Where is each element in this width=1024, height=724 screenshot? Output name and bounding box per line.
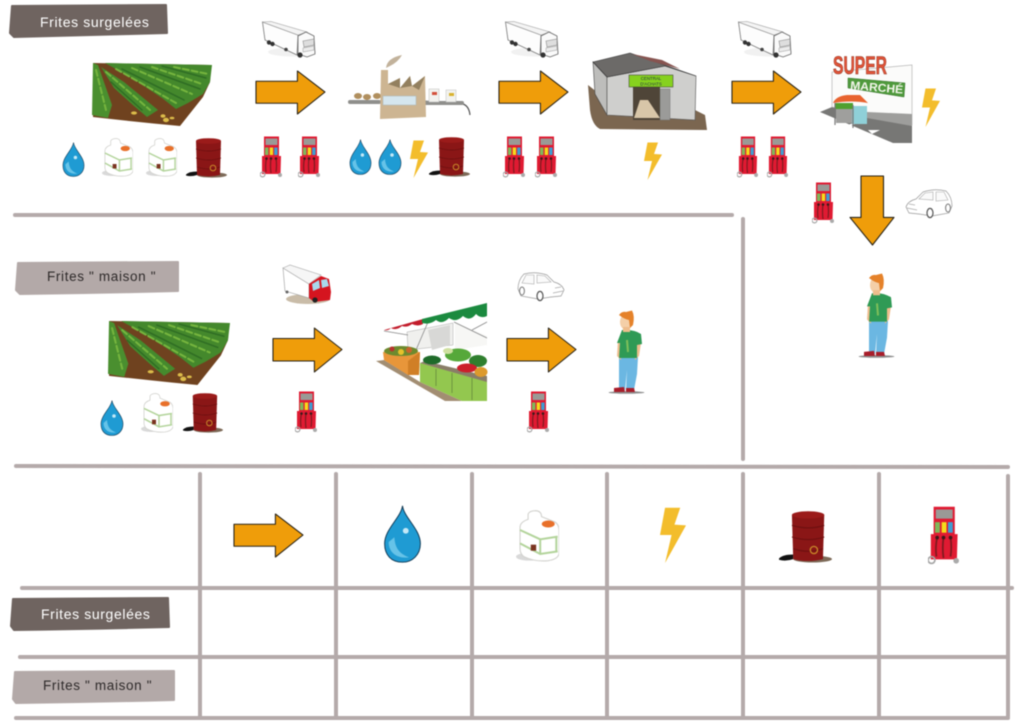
arrow 2 [499, 71, 568, 114]
icon: fertilizer jug 2 [146, 138, 177, 176]
table header icon: distance arrow [234, 514, 303, 557]
icon: energy bolt [644, 142, 662, 180]
illustration: factory [348, 55, 470, 119]
icon: water drop [379, 140, 401, 174]
arrow 1 [256, 71, 325, 114]
icon: small red truck [283, 265, 331, 304]
icon: fuel pump 5 [737, 136, 758, 177]
icon: consumer 1 [858, 274, 894, 358]
icon: fuel pump 9 [527, 392, 549, 432]
illustration: supermarket: SUPER [833, 52, 887, 80]
arrow: supermarket to consumer [850, 176, 894, 245]
icon: oil barrel [186, 138, 227, 178]
icon: consumer 2 [608, 310, 644, 394]
table header icon: oil [779, 511, 832, 562]
icon: truck 2 [506, 22, 559, 58]
icon: truck 1 [262, 22, 316, 58]
table header icon: fuel [928, 507, 959, 564]
icon: water drop [350, 140, 371, 174]
icon: car 1 [906, 190, 952, 218]
illustration: supermarket: MARCHÉ [850, 79, 904, 97]
arrow 5 [507, 328, 576, 372]
icon: energy bolt [922, 89, 940, 127]
illustration: supermarket [820, 52, 912, 143]
illustration: market stall [376, 303, 488, 401]
icon: water drop [63, 142, 84, 177]
panel divider lines [15, 215, 1012, 718]
table row label: Frites surgelées [11, 598, 169, 630]
icon: car 2 [518, 273, 564, 301]
icon: fuel pump 2 [298, 136, 320, 177]
table header icon: water [385, 506, 420, 562]
icon: fuel pump 3 [503, 136, 525, 177]
illustration: central purchasing warehouse: D'ACHATS [640, 82, 662, 86]
table row label: Frites maison [13, 671, 174, 703]
icon: energy bolt [410, 140, 428, 178]
icon: fertilizer jug [141, 394, 173, 432]
heading: Frites surgelées: Frites surgelées [40, 14, 150, 30]
icon: water drop [101, 400, 123, 436]
icon: fuel pump 8 [295, 392, 317, 432]
illustration: central purchasing warehouse: CENTRAL [641, 76, 662, 81]
arrow 3 [732, 71, 801, 114]
arrow 4 [273, 328, 342, 372]
icon: fuel pump 4 [535, 136, 557, 177]
illustration: central purchasing warehouse [588, 53, 707, 130]
icon: fertilizer jug 1 [102, 138, 133, 176]
icon: fuel pump 6 [767, 136, 788, 177]
table header icon: energy [660, 508, 686, 563]
icon: field, frozen fries chain [92, 63, 212, 126]
icon: fuel pump 1 [260, 136, 282, 177]
icon: truck 3 [738, 22, 792, 58]
heading: Frites maison: Frites " maison " [47, 269, 156, 284]
heading: Frites surgelées [10, 5, 167, 37]
table row label: Frites surgelées: Frites surgelées [41, 606, 151, 622]
table row label: Frites maison: Frites " maison " [43, 678, 152, 693]
table header icon: fertilizer [516, 511, 559, 561]
heading: Frites maison [16, 262, 178, 294]
icon: oil barrel [429, 137, 470, 177]
icon: fuel pump 7 [812, 182, 834, 223]
icon: oil barrel [183, 393, 223, 433]
icon: field, home-made chain [108, 321, 230, 385]
